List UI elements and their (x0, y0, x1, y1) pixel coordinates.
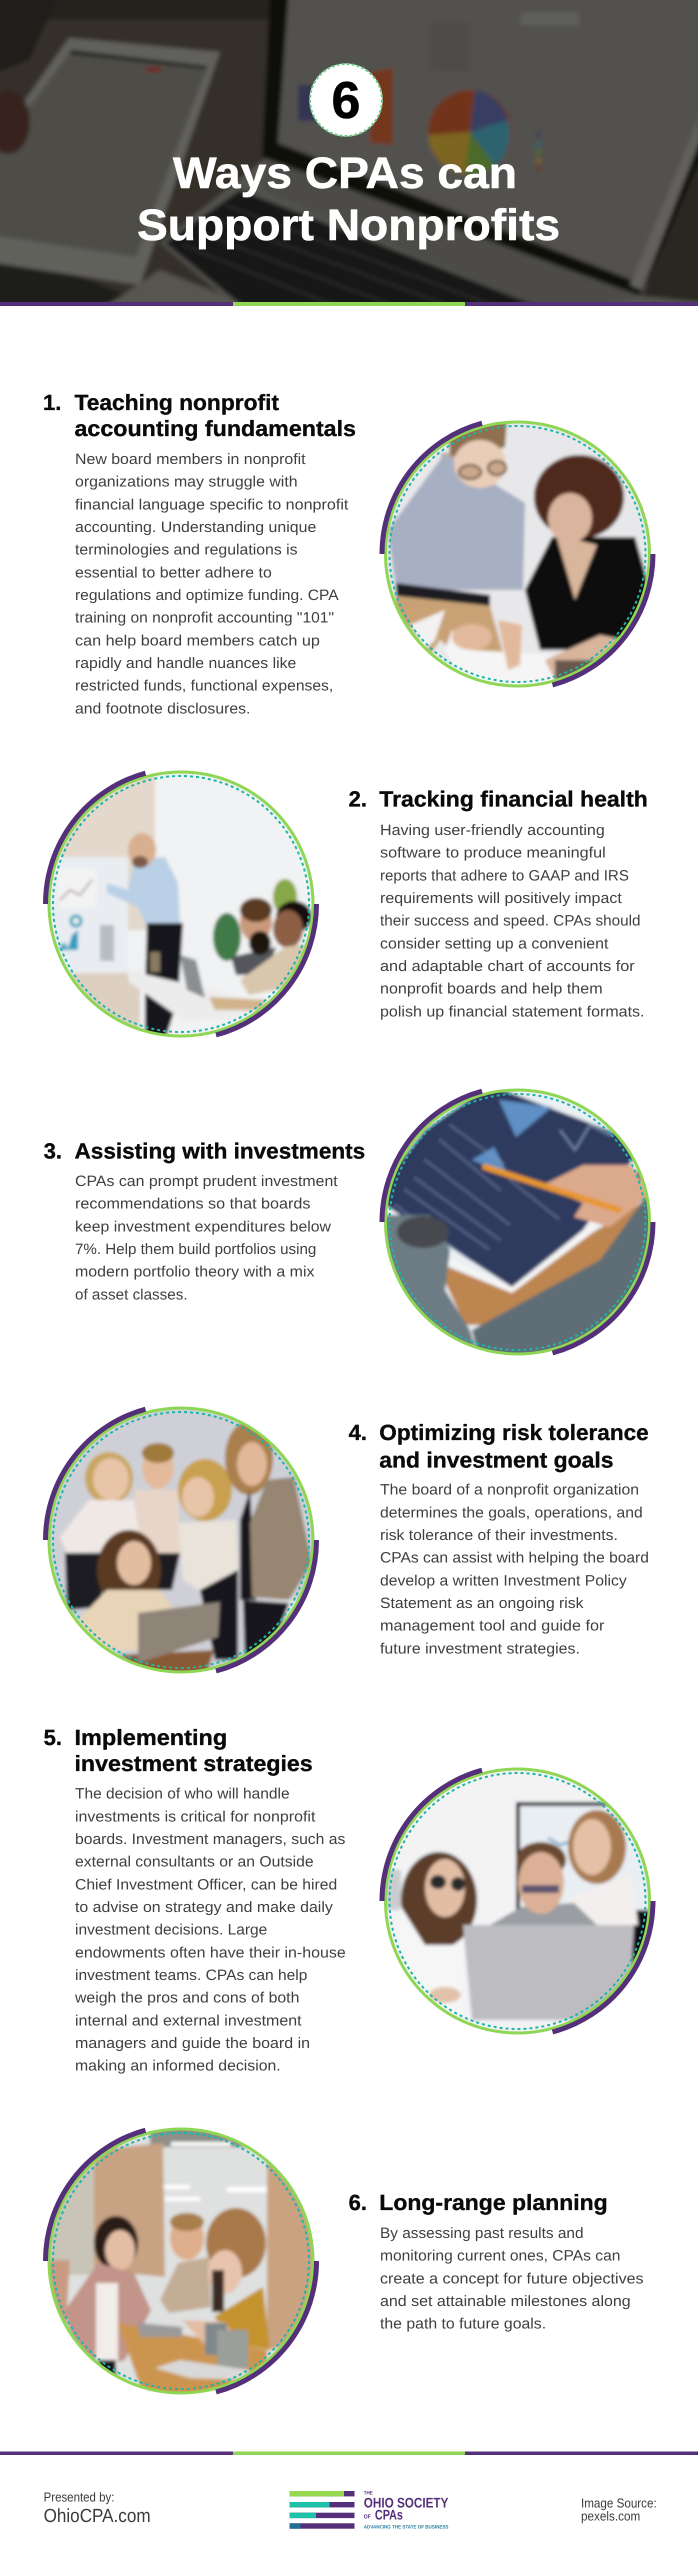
presented by (44, 2490, 151, 2527)
panel: section 3 investments (44, 1085, 660, 1365)
heading 1 (43, 390, 356, 441)
body text 2: and adaptable chart of accounts for (380, 958, 635, 975)
header banner (0, 0, 698, 310)
body text 4: future investment strategies. (380, 1640, 580, 1657)
title (137, 149, 560, 250)
icon: number 6 badge: 6 (332, 72, 360, 130)
body text 5: investment decisions. Large (75, 1922, 267, 1939)
heading 1: accounting fundamentals (74, 416, 356, 441)
body text 1: can help board members catch up (75, 632, 320, 649)
body text 4: The board of a nonprofit organization (380, 1482, 639, 1499)
body text 3: 7%. Help them build portfolios using (75, 1241, 316, 1258)
panel: section 1 teaching (43, 390, 660, 717)
tablet (0, 38, 220, 285)
body text 1: accounting. Understanding unique (75, 519, 316, 536)
body text 2: polish up financial statement formats. (380, 1003, 644, 1020)
body text 6: monitoring current ones, CPAs can (380, 2248, 620, 2265)
body text 4: develop a written Investment Policy (380, 1572, 627, 1589)
body text 5: endowments often have their in-house (75, 1944, 346, 1961)
panel: section 4 risk tolerance (44, 1400, 649, 1680)
body text 5: investment teams. CPAs can help (75, 1967, 307, 1984)
heading 2: 2. (349, 787, 367, 812)
body text 5: making an informed decision. (75, 2058, 281, 2075)
presented by: OhioCPA.com (44, 2506, 151, 2527)
heading 5: investment strategies (74, 1751, 313, 1776)
body text 6: create a concept for future objectives (380, 2270, 644, 2287)
body text 3: modern portfolio theory with a mix (75, 1264, 315, 1281)
heading 1: 1. (43, 390, 61, 415)
pie chart (426, 88, 513, 146)
title: Ways CPAs can (173, 149, 517, 198)
footer (0, 2452, 698, 2530)
photo circle 4: team around laptop (44, 1400, 324, 1680)
body text 4: risk tolerance of their investments. (380, 1527, 618, 1544)
body text 5: The decision of who will handle (75, 1786, 290, 1803)
body text 4: determines the goals, operations, and (380, 1504, 643, 1521)
heading 3: Assisting with investments (74, 1138, 365, 1163)
logo: Ohio Society of CPAs: THE (364, 2491, 373, 2497)
body text 2 (380, 822, 644, 1020)
body text 1: training on nonprofit accounting "101" (75, 610, 334, 627)
body text 6: the path to future goals. (380, 2316, 546, 2333)
body text 4: Statement as an ongoing risk (380, 1595, 584, 1612)
heading 6: Long-range planning (379, 2190, 608, 2215)
body text 4: management tool and guide for (380, 1618, 604, 1635)
photo circle 6: group at wooden table (44, 2125, 324, 2400)
body text 2: requirements will positively impact (380, 890, 623, 907)
logo: Ohio Society of CPAs: ADVANCING THE STATE OF BUSINESS (364, 2524, 449, 2530)
logo: Ohio Society of CPAs (290, 2491, 449, 2530)
title: Support Nonprofits (137, 201, 560, 250)
body text 5: weigh the pros and cons of both (74, 1990, 299, 2007)
body text 5: external consultants or an Outside (75, 1854, 314, 1871)
body text 3: recommendations so that boards (75, 1196, 310, 1213)
image source: Image Source: (581, 2495, 657, 2510)
photo circle 1: two women reviewing papers (380, 415, 660, 700)
heading 5: 5. (44, 1725, 62, 1750)
body text 1: organizations may struggle with (75, 474, 298, 491)
body text 5: internal and external investment (75, 2012, 302, 2029)
body text 2: nonprofit boards and help them (380, 981, 603, 998)
body text 5: to advise on strategy and make daily (75, 1899, 333, 1916)
body text 1: regulations and optimize funding. CPA (75, 587, 339, 604)
body text 1: essential to better adhere to (75, 564, 272, 581)
body text 2: software to produce meaningful (380, 845, 606, 862)
heading 6: 6. (349, 2190, 367, 2215)
body text 6: By assessing past results and (380, 2225, 584, 2242)
body text 3: of asset classes. (75, 1286, 188, 1303)
body text 3: keep investment expenditures below (75, 1218, 331, 1235)
icon: number 6 badge (310, 64, 382, 136)
body text 5: managers and guide the board in (75, 2035, 310, 2052)
body text 5: Chief Investment Officer, can be hired (75, 1876, 337, 1893)
heading 1: Teaching nonprofit (74, 390, 280, 415)
body text 4 (380, 1482, 649, 1657)
header photo: laptop and tablet (0, 0, 698, 310)
body text 1: terminologies and regulations is (75, 542, 298, 559)
panel: section 5 strategies (44, 1725, 660, 2075)
image source (581, 2495, 657, 2524)
body text 5: boards. Investment managers, such as (75, 1831, 345, 1848)
panel: section 6 planning (44, 2125, 644, 2400)
body text 1: rapidly and handle nuances like (75, 655, 296, 672)
heading 3: 3. (44, 1138, 62, 1163)
body text 6: and set attainable milestones along (380, 2293, 631, 2310)
photo circle 5: three colleagues at laptop (380, 1765, 660, 2045)
laptop screen (262, 0, 698, 296)
body text 1: New board members in nonprofit (75, 451, 306, 468)
laptop base and keys (160, 157, 698, 310)
heading 5: Implementing (74, 1725, 227, 1750)
logo: Ohio Society of CPAs: OHIO SOCIETY (364, 2494, 449, 2510)
heading 4: 4. (349, 1420, 367, 1445)
heading 2: Tracking financial health (379, 787, 648, 812)
logo: Ohio Society of CPAs: OF (364, 2514, 371, 2521)
heading 4: and investment goals (379, 1447, 614, 1472)
presented by: Presented by: (44, 2490, 114, 2505)
body text 2: reports that adhere to GAAP and IRS (380, 867, 629, 884)
body text 2: Having user-friendly accounting (380, 822, 605, 839)
body text 2: their success and speed. CPAs should (380, 913, 640, 930)
body text 1 (75, 451, 349, 717)
panel: section 2 tracking (44, 765, 648, 1045)
logo: Ohio Society of CPAs: CPAs (375, 2506, 403, 2522)
body text 5 (74, 1786, 346, 2075)
body text 1: and footnote disclosures. (75, 700, 250, 717)
body text 3 (75, 1173, 339, 1303)
body text 3: CPAs can prompt prudent investment (75, 1173, 339, 1190)
body text 6 (380, 2225, 644, 2333)
heading 4 (349, 1420, 649, 1472)
body text 1: financial language specific to nonprofit (75, 496, 349, 513)
body text 4: CPAs can assist with helping the board (380, 1550, 649, 1567)
body text 5: investments is critical for nonprofit (75, 1808, 316, 1825)
photo circle 2: presenter at whiteboard (44, 765, 324, 1045)
body text 1: restricted funds, functional expenses, (75, 678, 333, 695)
heading 4: Optimizing risk tolerance (379, 1420, 649, 1445)
heading 5 (44, 1725, 313, 1776)
photo circle 3: pen pointing at financial report (380, 1085, 660, 1365)
image source: pexels.com (581, 2508, 640, 2524)
body text 2: consider setting up a convenient (380, 935, 609, 952)
